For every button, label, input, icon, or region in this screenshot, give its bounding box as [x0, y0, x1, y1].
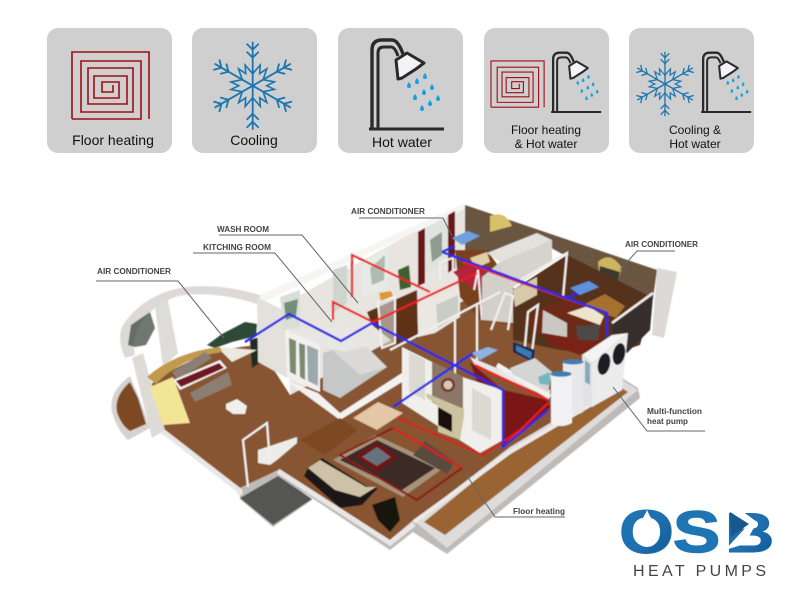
- indoor air conditioner plates: [452, 231, 599, 360]
- callout: multi-function heat pump: heat pump: [647, 417, 688, 426]
- label: cooling and hot water: Cooling &: [669, 123, 721, 137]
- dark room behind fireplace wall: [470, 362, 550, 448]
- bedroom railing: [612, 293, 653, 323]
- card: cooling: [192, 28, 317, 153]
- main bed: [567, 294, 625, 340]
- round room arc wall: [120, 286, 260, 358]
- label: hot water: Hot water: [372, 134, 432, 150]
- icon: floor heating coil: [72, 52, 149, 119]
- terrace strip: [414, 380, 638, 548]
- heat pump: [582, 333, 628, 407]
- callout: kitching room: KITCHING ROOM: [203, 243, 271, 252]
- foliage band: [207, 322, 257, 348]
- isometric house cutaway: [111, 203, 677, 554]
- card: floor heating: [47, 28, 172, 153]
- center floor patch: [478, 350, 513, 367]
- callout: air conditioner right: [620, 240, 698, 270]
- callout: floor heating: [465, 473, 565, 517]
- upper floors: [455, 250, 515, 325]
- outer footprint and rim: [147, 300, 640, 554]
- water tanks: [550, 360, 584, 426]
- red pipes upper: [333, 255, 607, 337]
- potted plant: [250, 336, 264, 368]
- living room partition: [470, 357, 550, 398]
- main floor: [147, 300, 615, 540]
- end wall: [652, 268, 677, 338]
- cream floor panel: [353, 402, 403, 430]
- glass door upstairs: [378, 297, 395, 348]
- living room set: [300, 418, 455, 532]
- icon: shower: [369, 40, 444, 129]
- callout: multi-function heat pump: [613, 387, 705, 431]
- label: floor heating and hot water: Floor heating: [511, 123, 581, 137]
- dark upper floor: [367, 290, 418, 345]
- blue pipes: [245, 246, 607, 447]
- logo letter O with drop: O: [619, 498, 674, 566]
- picture: [598, 266, 620, 290]
- dining table with chairs: [172, 352, 232, 402]
- round room column: [155, 300, 178, 367]
- callout: wash room: WASH ROOM: [217, 225, 269, 234]
- callout: air conditioner right: AIR CONDITIONER: [625, 240, 698, 249]
- red guest bed: [453, 262, 484, 290]
- icon: snowflake: [208, 42, 298, 130]
- back wall left: [288, 203, 465, 395]
- callout: air conditioner left: AIR CONDITIONER: [97, 267, 171, 276]
- corner low wall: [258, 437, 297, 465]
- logo tagline: HEAT PUMPS: [633, 563, 766, 580]
- round room floor edge: [147, 347, 222, 384]
- door frame: [243, 423, 270, 487]
- partition in right room: [542, 310, 567, 337]
- glass door frames: [390, 253, 567, 405]
- TV room partition: [497, 365, 550, 397]
- orange furniture: [379, 291, 393, 301]
- white partition box: [418, 287, 460, 337]
- label: floor heating and hot water: & Hot water: [515, 137, 577, 151]
- dining floor light: [150, 377, 190, 425]
- floor below bed: [520, 296, 610, 345]
- windows on back wall: [280, 211, 455, 330]
- callout: air conditioner top: [351, 207, 452, 236]
- floor patch by kitchen: [388, 345, 402, 367]
- balcony: [111, 376, 150, 440]
- kitchen cabinets: [285, 325, 402, 420]
- logo: OSB heat pumps: [619, 498, 774, 580]
- icon: shower small: [551, 53, 601, 112]
- label: cooling: Cooling: [230, 132, 278, 148]
- red pipes to tank: [475, 365, 548, 447]
- right rooms floor: [513, 255, 653, 355]
- logo letter S: S: [673, 499, 720, 565]
- callout: multi-function heat pump: Multi-function: [647, 407, 702, 416]
- callout: air conditioner left: [96, 267, 224, 338]
- door frames near bed: [440, 258, 482, 320]
- TV and bath: [510, 342, 552, 392]
- card: hot water: [338, 28, 463, 153]
- closet block: [482, 233, 552, 323]
- living room outer wall: [414, 405, 590, 522]
- low unit: [226, 399, 247, 414]
- corner wall: [257, 297, 287, 378]
- icon: shower small: [701, 53, 751, 112]
- window seat: [217, 347, 257, 362]
- icon: snowflake small: [632, 52, 698, 116]
- bedroom wall: [465, 205, 657, 298]
- garden tree: [128, 312, 155, 347]
- label: floor heating: Floor heating: [72, 132, 154, 148]
- round room front pillar: [132, 353, 165, 438]
- small bedroom bed: [513, 277, 537, 307]
- icon: floor heating coil small: [491, 61, 544, 107]
- red floor lines: [543, 333, 600, 355]
- front rims: [147, 419, 414, 543]
- fireplace wall: [402, 347, 503, 453]
- logo letter B with wedge: B: [725, 502, 774, 565]
- callout: air conditioner top: AIR CONDITIONER: [351, 207, 425, 216]
- callout: kitching room: [193, 243, 332, 322]
- card: floor heating and hot water: [484, 28, 609, 153]
- plant: [398, 265, 411, 290]
- card: cooling and hot water: [629, 28, 754, 153]
- doormat: [240, 476, 312, 525]
- floor heating pipes living room: [340, 418, 520, 500]
- callout: wash room: [217, 225, 358, 303]
- callout: floor heating: Floor heating: [513, 507, 565, 516]
- label: cooling and hot water: Hot water: [669, 137, 721, 151]
